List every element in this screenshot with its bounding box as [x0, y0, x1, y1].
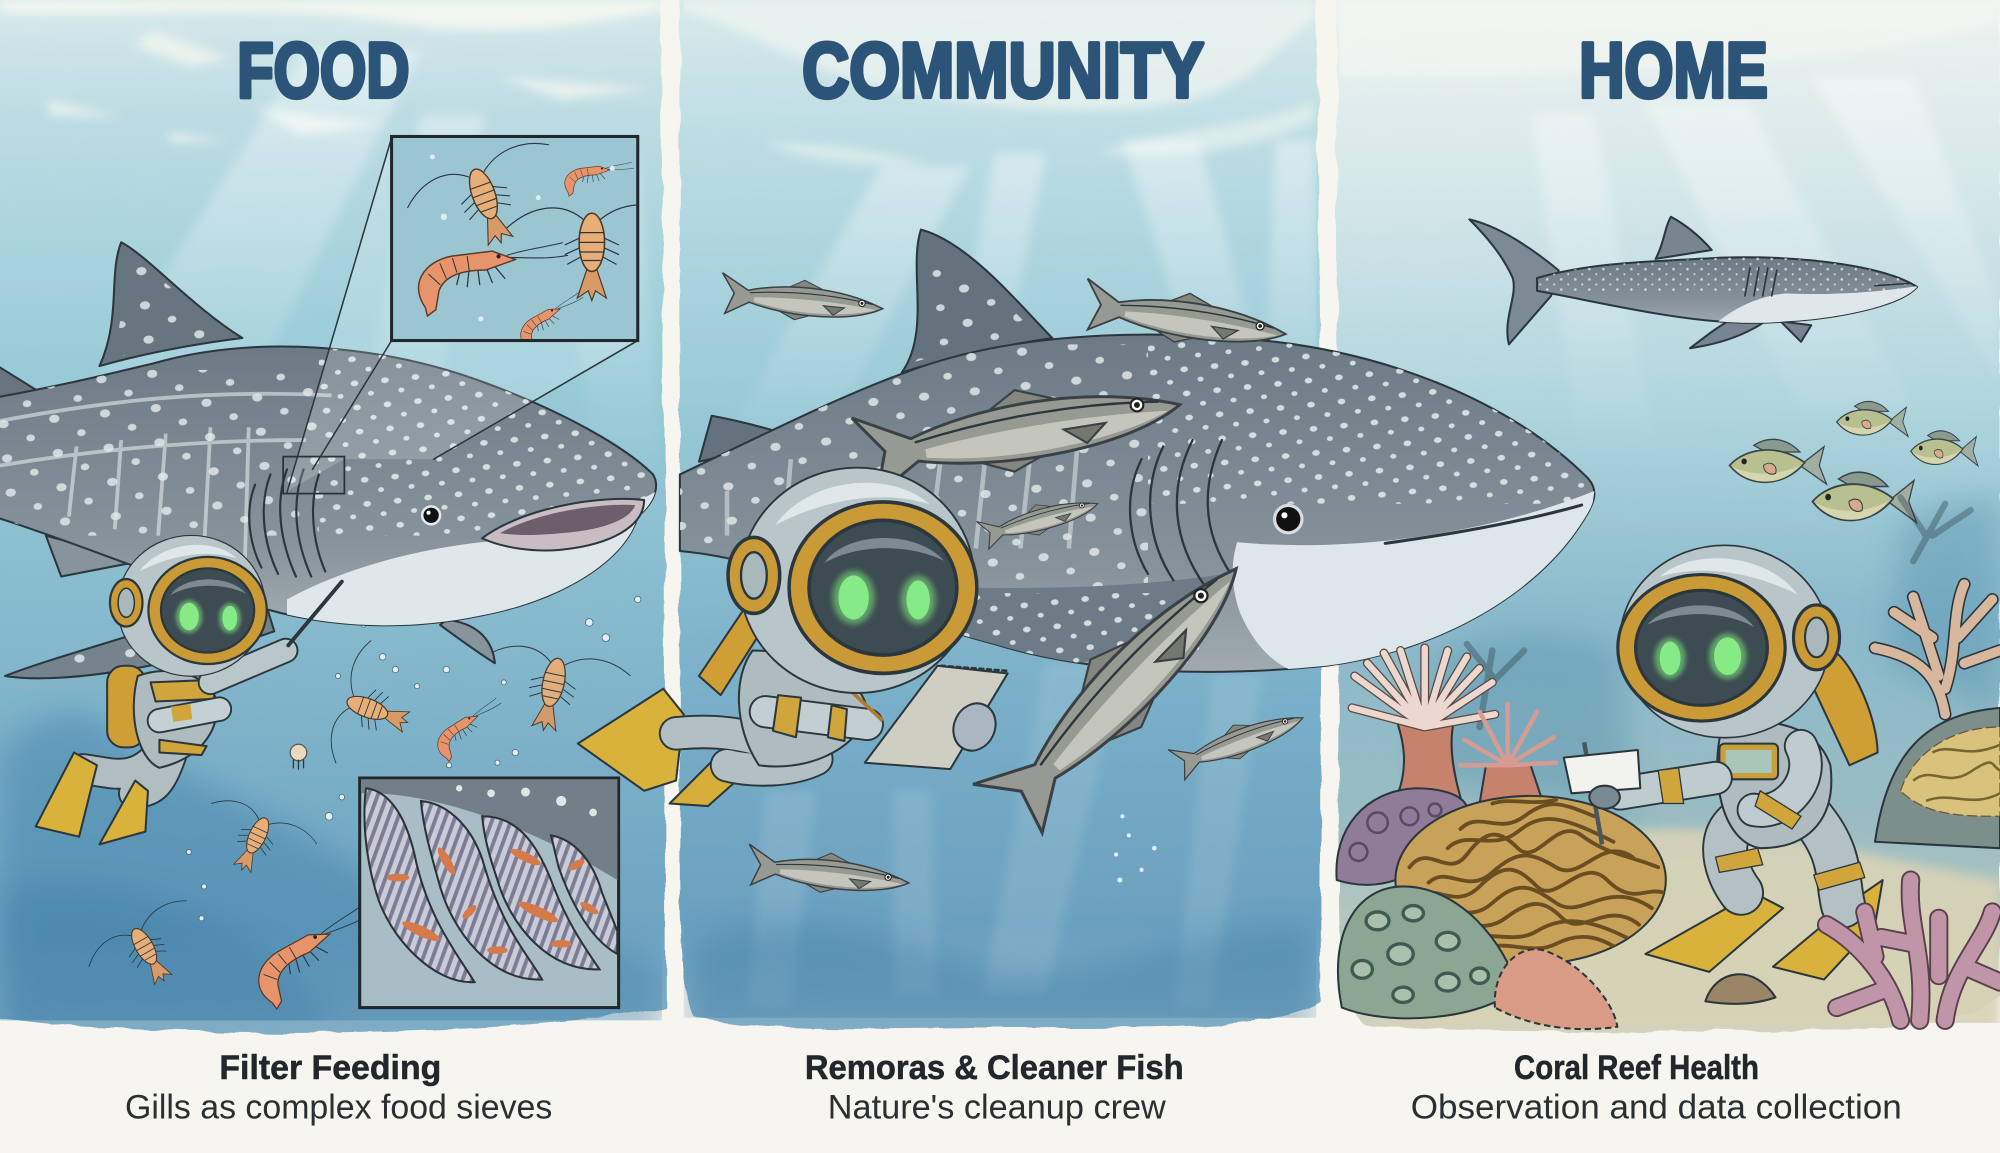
brain coral [1395, 796, 1666, 964]
notepad [865, 666, 1008, 769]
inset: plankton close-up [390, 134, 640, 342]
copepod lower left [191, 790, 320, 894]
remora school [718, 272, 1309, 904]
whale shark: community [680, 230, 1594, 679]
trapped krill [386, 845, 600, 954]
large anemone [1352, 648, 1495, 810]
caption text: home: Observation and data collection [1411, 1089, 1902, 1127]
shark body [0, 347, 656, 625]
fish three [1911, 431, 1978, 466]
remora small on flank [976, 489, 1102, 551]
community water wash [680, 0, 1321, 1029]
coral reef [1336, 497, 2000, 1029]
copepod lower right [474, 637, 632, 746]
purple coral [1336, 788, 1468, 885]
whale shark: food [0, 242, 657, 678]
remora lower right [1168, 702, 1309, 782]
food surface highlights and light rays [0, 0, 663, 1039]
small rock [1705, 974, 1776, 1004]
fish striped [1812, 472, 1917, 523]
air tank [699, 606, 769, 695]
spots, stripes, belly, gills [680, 338, 1594, 679]
fish one [1730, 439, 1827, 484]
helmet [110, 535, 267, 676]
front fin [578, 689, 684, 791]
tan branching coral [1875, 584, 2000, 714]
hand on pad [946, 696, 1003, 758]
diver robot: food [36, 535, 342, 844]
arm with gold bands [765, 712, 867, 724]
caption heading: filter feeding: Filter Feeding [219, 1049, 441, 1087]
fish two [1837, 401, 1908, 437]
eye [1273, 504, 1304, 534]
shark body [680, 335, 1594, 672]
yellow coral on mound [1901, 727, 2000, 816]
panel: community [680, 0, 1321, 1039]
remora upper left [718, 272, 885, 330]
shrimp lower [245, 903, 391, 1012]
right mound [1875, 708, 2000, 848]
dorsal spots [913, 242, 1040, 362]
reef fish school [1730, 401, 1978, 523]
lower fins [46, 536, 495, 663]
pale copepod [81, 894, 216, 1010]
torso [1717, 722, 1831, 848]
panel: food [0, 0, 666, 1039]
torso [739, 650, 867, 766]
tail [1469, 219, 1559, 344]
fins [1645, 880, 1883, 980]
diver robot: community [578, 468, 1008, 806]
panel: home [1337, 0, 2000, 1039]
home water wash [1337, 0, 2000, 1032]
home surface highlights and light rays [1337, 0, 2000, 1039]
helmet [728, 468, 977, 693]
legs [1725, 816, 1843, 906]
pink coral mound [1495, 949, 1617, 1029]
eye [421, 505, 441, 525]
inset frame [392, 136, 638, 341]
remora on back [1080, 277, 1290, 360]
inset creatures [407, 142, 636, 339]
remora large on flank [851, 365, 1186, 498]
fin spots [26, 593, 268, 672]
air tank [1805, 653, 1878, 765]
purple coral polyps [1349, 804, 1441, 861]
free plankton and bubbles: food [81, 561, 641, 1012]
chest panel [1719, 744, 1778, 779]
diver robot: home [1564, 545, 1883, 980]
arms [1620, 746, 1806, 811]
mouth [482, 499, 644, 550]
helmet [1618, 545, 1840, 738]
small whale shark: home [1469, 217, 1920, 348]
green copepod [320, 638, 430, 781]
title: food: FOOD [237, 28, 409, 114]
small shrimp mid [429, 697, 514, 763]
remora bottom [744, 843, 911, 904]
caption text: community: Nature's cleanup crew [828, 1089, 1166, 1127]
back fin [670, 746, 753, 806]
remora diagonal [971, 540, 1268, 842]
caption heading: coral reef: Coral Reef Health [1514, 1049, 1759, 1087]
bubbles [1114, 814, 1157, 883]
dorsal and tail fins [0, 242, 242, 403]
fins [1656, 217, 1811, 348]
torso [134, 671, 217, 768]
air tank [107, 666, 145, 747]
food water wash [0, 0, 666, 1032]
pectoral fin [5, 589, 274, 678]
spots, belly and gills [1539, 258, 1917, 323]
caption heading: remoras: Remoras & Cleaner Fish [805, 1049, 1184, 1087]
small anemone [1460, 704, 1556, 804]
magnifier callout lines [283, 136, 638, 494]
bubbles [430, 154, 615, 321]
inset: gill rakers close-up [360, 778, 619, 1008]
dorsal and second dorsal fins [699, 230, 1052, 462]
spots, stripes, belly, gills [0, 344, 657, 630]
foreground pink coral [1827, 880, 2000, 1020]
green coral [1338, 886, 1518, 1018]
background blue coral silhouettes [1467, 497, 1971, 727]
pointer stick [288, 582, 342, 645]
near arm [159, 709, 219, 721]
bubble stream [186, 561, 641, 921]
pointing arm [210, 650, 286, 682]
legs [83, 753, 172, 793]
survey marker [1564, 742, 1640, 844]
body [1537, 257, 1917, 323]
title: home: HOME [1579, 28, 1768, 114]
community surface highlights and light rays [680, 0, 1320, 1039]
small jelly [290, 744, 307, 769]
dorsal spots [108, 253, 230, 360]
pencil [842, 682, 883, 721]
caption text: food: Gills as complex food sieves [125, 1089, 552, 1127]
leg [676, 732, 816, 769]
fins [36, 753, 148, 844]
closed mouth [1385, 505, 1582, 543]
title: community: COMMUNITY [802, 28, 1204, 114]
